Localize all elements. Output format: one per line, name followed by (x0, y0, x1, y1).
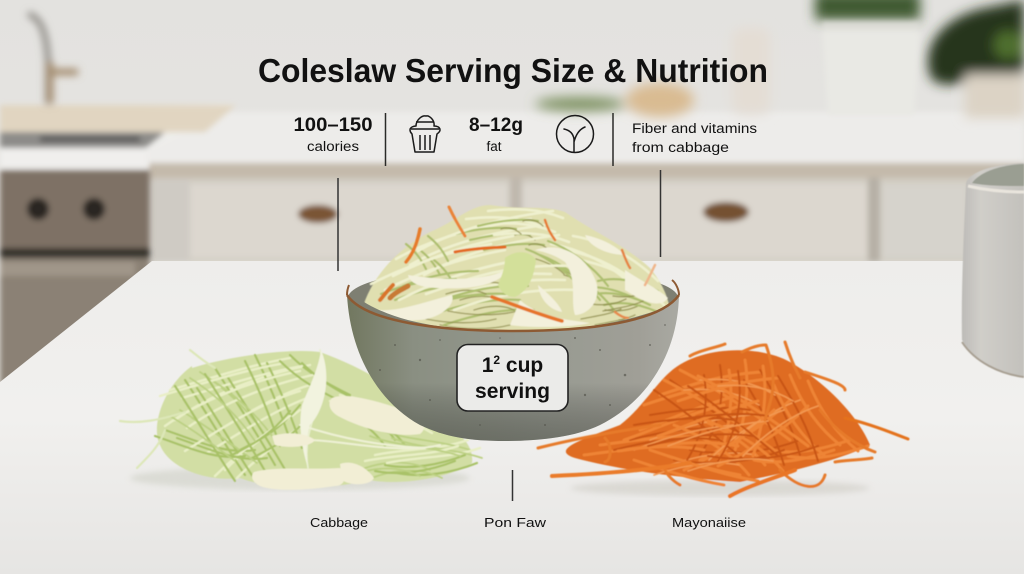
bowl rim (347, 295, 679, 331)
icon: coleslaw cup (410, 116, 440, 152)
label: cabbage: Cabbage (310, 515, 368, 530)
callout line left (337, 178, 339, 271)
stat: fat (469, 114, 523, 154)
callout line right (660, 170, 662, 257)
serving size badge: 1 (482, 354, 493, 377)
divider line after calories (384, 113, 386, 166)
stat: fiber and vitamins: from cabbage (632, 140, 729, 155)
serving size badge (457, 344, 568, 411)
mayonnaise pieces (252, 396, 424, 490)
carrot strips in slaw (380, 207, 655, 321)
stat: calories: calories (307, 139, 359, 154)
plants and pots (535, 0, 1024, 118)
serving size badge: serving (475, 380, 550, 403)
bowl speckles (379, 324, 666, 426)
sink, faucet and oven (0, 105, 236, 388)
stat: fat: 8–12g (469, 114, 523, 136)
callout line bottom (512, 470, 514, 501)
stat: fiber and vitamins: Fiber and vitamins (632, 121, 757, 136)
icon: sprout in circle (556, 116, 594, 152)
dressed cabbage pieces (378, 235, 668, 327)
title: Coleslaw Serving Size & Nutrition (258, 52, 768, 89)
carrot pile (538, 342, 908, 496)
slaw mound (362, 205, 670, 340)
serving size badge: cup (500, 354, 543, 377)
marble countertop (0, 261, 1024, 574)
stat: fiber and vitamins (632, 121, 757, 155)
stat: fat: fat (486, 139, 502, 154)
divider line after fiber icon (612, 113, 614, 166)
serving size badge: 2 (493, 353, 500, 367)
back counter and cabinets (145, 106, 1024, 263)
bowl interior back rim (348, 266, 678, 330)
stat: calories (294, 114, 373, 154)
label: center ingredient: Pon Faw (484, 515, 547, 530)
mug (962, 163, 1024, 377)
stat: calories: 100–150 (294, 114, 373, 136)
cabbage pile (120, 350, 482, 490)
bowl of coleslaw (347, 205, 679, 441)
bowl body (347, 295, 679, 441)
label: mayonnaise: Mayonaiise (672, 515, 746, 530)
